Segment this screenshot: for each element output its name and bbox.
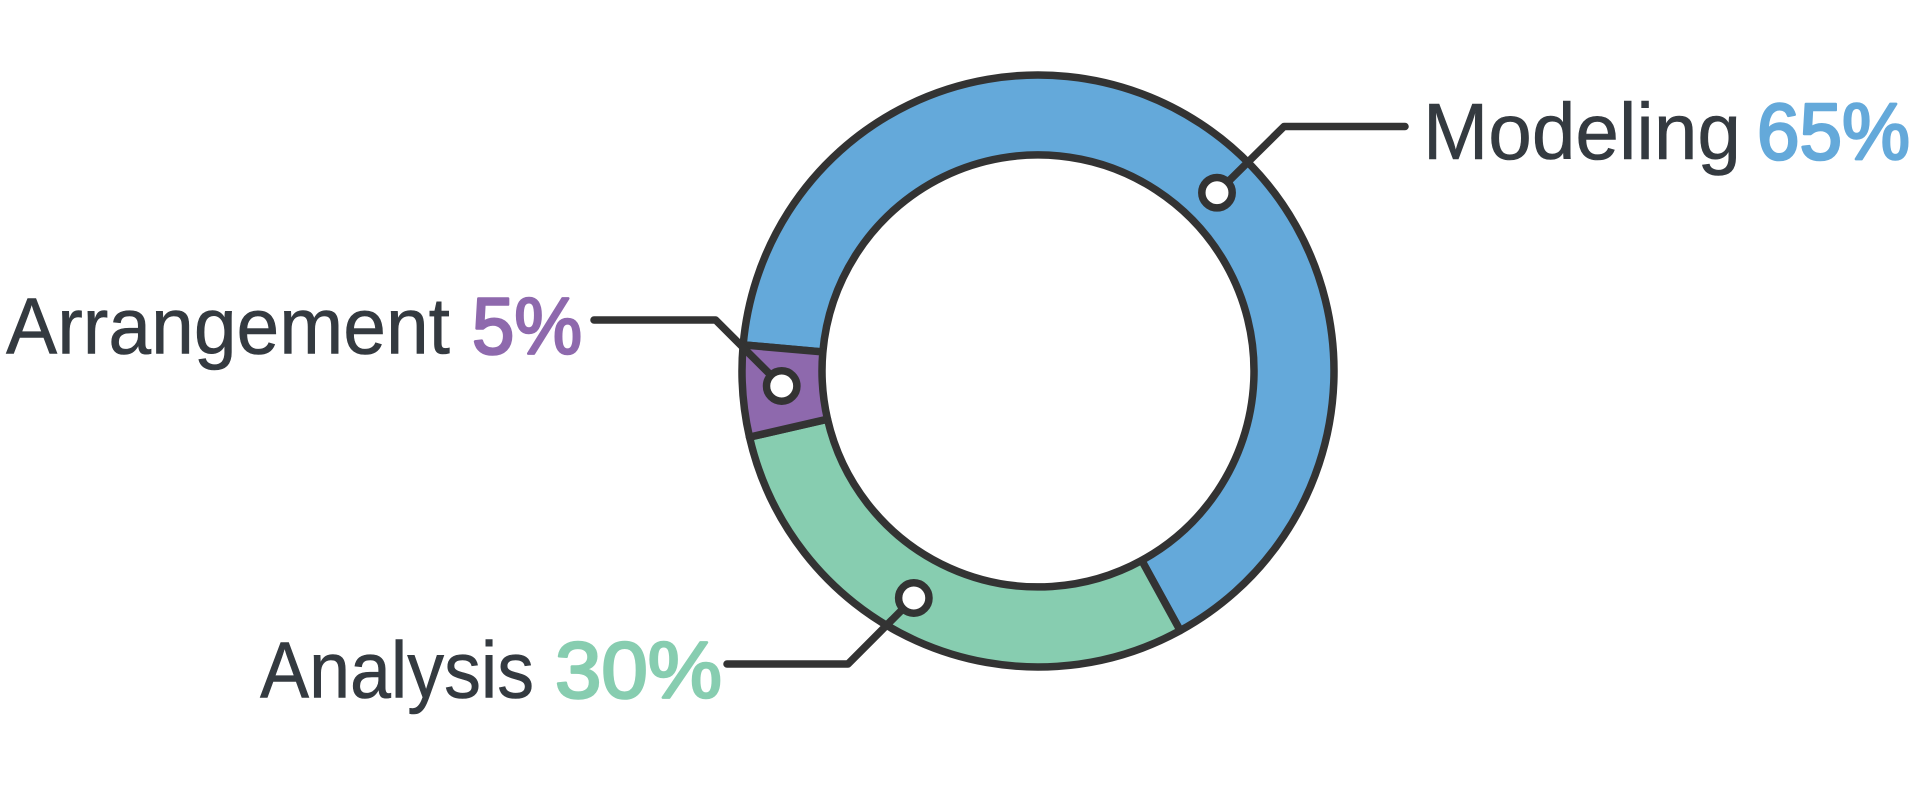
leader line: arrangement — [594, 320, 782, 386]
label: analysis 30%: Analysis — [260, 626, 534, 714]
label: modeling 65%: 65% — [1757, 87, 1910, 176]
segment: arrangement 5% — [742, 345, 828, 437]
label: modeling 65% — [1423, 87, 1910, 176]
marker: arrangement — [766, 371, 797, 401]
donut chart — [742, 75, 1334, 667]
leader line: modeling — [1217, 126, 1405, 193]
marker: modeling — [1202, 178, 1232, 208]
label: analysis 30% — [260, 626, 722, 714]
label: arrangement 5%: 5% — [472, 282, 582, 370]
segment: analysis 30% — [750, 419, 1180, 667]
marker: analysis — [899, 583, 929, 613]
label: arrangement 5%: Arrangement — [6, 282, 450, 370]
callout: arrangement — [6, 282, 797, 401]
label: modeling 65%: Modeling — [1423, 87, 1741, 176]
callout: analysis — [260, 583, 929, 714]
leader line: analysis — [727, 598, 914, 664]
callout: modeling — [1202, 87, 1910, 208]
segment: modeling 65% — [743, 75, 1334, 631]
label: analysis 30%: 30% — [555, 626, 722, 714]
